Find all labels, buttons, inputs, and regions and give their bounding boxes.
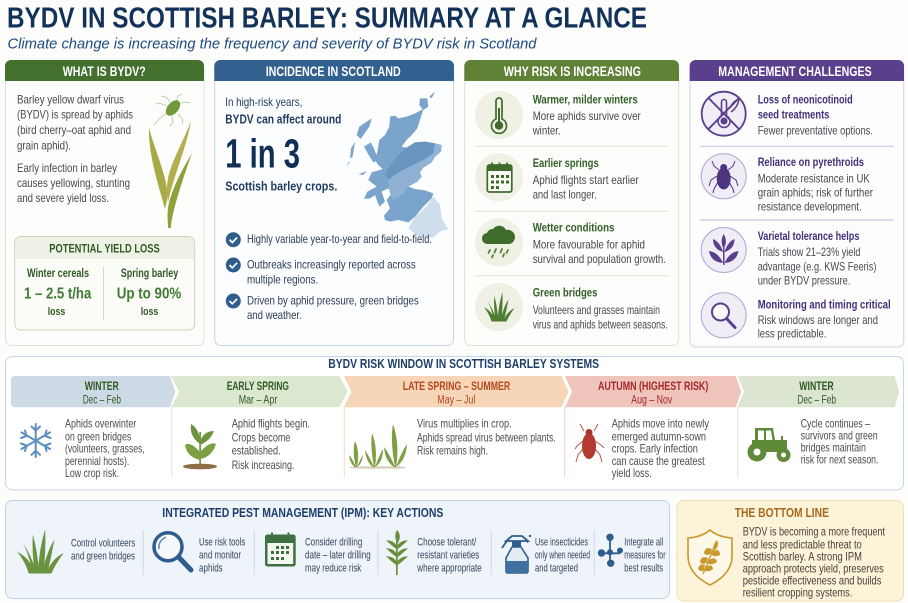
text: 1 in 3 statistic: BYDV can affect around	[225, 112, 341, 126]
icon: red aphid	[575, 424, 604, 462]
item: earlier springs: and last longer.	[533, 189, 597, 202]
text: bottom line summary: resilient cropping systems.	[743, 586, 852, 599]
action: targeted insecticides	[502, 535, 590, 575]
heading: the bottom line: THE BOTTOM LINE	[735, 505, 829, 520]
action: tolerant varieties: Choose tolerant/	[417, 536, 476, 548]
subtitle: Climate change is increasing the frequency and severity of BYDV risk in Scotland	[8, 36, 537, 52]
stat: spring barley: Spring barley	[121, 268, 179, 280]
panel: what is BYDV	[5, 60, 204, 346]
action: tolerant varieties: resistant varieties	[417, 550, 480, 562]
item: warmer winters: Warmer, milder winters	[533, 92, 638, 106]
bullet: outbreaks	[226, 258, 416, 286]
panel header: what is BYDV: WHAT IS BYDV?	[63, 63, 146, 79]
item: wetter conditions: survival and population growth.	[533, 253, 666, 266]
item: loss of neonicotinoids: Loss of neonicotinoid	[758, 92, 853, 106]
stat: winter cereals: 1 – 2.5 t/ha	[24, 286, 91, 302]
panel header: incidence	[214, 60, 454, 81]
action: integrate all measures: Integrate all	[624, 536, 663, 548]
heading: risk window: BYDV RISK WINDOW IN SCOTTISH BARLEY SYSTEMS	[328, 357, 599, 371]
item: monitoring and timing	[701, 293, 891, 341]
bullet: drivers: and weather.	[247, 309, 302, 322]
icon: seedling	[183, 424, 217, 469]
stage: autumn highest risk: Aug – Nov	[631, 394, 672, 406]
item: reliance on pyrethroids	[701, 154, 873, 214]
bullet: outbreaks: multiple regions.	[247, 273, 318, 286]
item: earlier springs: Earlier springs	[533, 156, 599, 170]
stat: spring barley: Up to 90%	[117, 286, 181, 302]
stage: autumn highest risk: crops. Early infection	[612, 443, 698, 456]
item: varietal tolerance: Trials show 21–23% yield	[758, 246, 860, 259]
bullet: variable: Highly variable year-to-year and field-to-field.	[247, 233, 432, 246]
stage: winter again: WINTER	[799, 381, 834, 393]
item: wetter conditions: More favourable for aphid	[533, 238, 645, 251]
stage: winter	[11, 376, 175, 480]
text: bottom line summary: Scottish barley. A strong IPM	[743, 550, 862, 563]
action: risk tools	[154, 533, 246, 575]
bullet: drivers: Driven by aphid pressure, green bridges	[247, 294, 419, 307]
stage: winter: Dec – Feb	[83, 394, 121, 406]
item: earlier springs	[475, 153, 639, 202]
action: drilling date: Consider drilling	[305, 536, 362, 548]
stage: winter: WINTER	[85, 381, 119, 393]
text: BYDV description: (bird cherry–oat aphid and	[17, 124, 131, 137]
panel: incidence in Scotland	[214, 60, 454, 346]
icon: aphid	[154, 94, 190, 126]
item: green bridges	[475, 283, 668, 331]
action: drilling date	[265, 532, 371, 575]
stage: early spring: EARLY SPRING	[227, 381, 289, 393]
stage: winter again	[738, 376, 899, 467]
stage: winter: Low crop risk.	[65, 467, 119, 480]
text: 1 in 3 statistic	[225, 95, 341, 194]
stage: autumn highest risk	[565, 376, 741, 480]
text: BYDV description: grain aphid).	[17, 140, 71, 152]
text: BYDV description: (BYDV) is spread by aphids	[17, 109, 133, 122]
panel: integrated pest management	[6, 500, 670, 598]
stage: autumn highest risk: Aphids move into newly	[612, 418, 709, 431]
item: reliance on pyrethroids: Reliance on pyrethroids	[758, 155, 864, 169]
stage: late spring to summer: Risk remains high.	[417, 445, 488, 458]
stage: winter again: survivors and green	[801, 429, 878, 442]
stage: early spring: Risk increasing.	[232, 459, 294, 472]
stage: winter: (volunteers, grasses,	[65, 443, 145, 456]
text: 1 in 3 statistic: In high-risk years,	[225, 95, 302, 109]
text: bottom line summary	[743, 526, 886, 599]
stage: early spring: established.	[232, 445, 281, 458]
item: monitoring and timing: Risk windows are longer and	[758, 314, 878, 327]
text: bottom line summary: and less predictable threat to	[743, 538, 862, 551]
bullet: variable	[226, 232, 432, 247]
stage: late spring to summer: Aphids spread virus between plants.	[417, 432, 556, 445]
action: tolerant varieties	[386, 530, 482, 575]
action: integrate all measures	[598, 534, 666, 575]
stage: winter again: risk for next season.	[801, 454, 878, 467]
stage: autumn highest risk: emerged autumn-sown	[612, 430, 706, 443]
item: varietal tolerance: under BYDV pressure.	[758, 274, 850, 287]
stage: autumn highest risk: can cause the greatest	[612, 455, 705, 468]
stage: autumn highest risk: yield loss.	[612, 467, 652, 480]
item: loss of neonicotinoids: seed treatments	[758, 107, 830, 121]
item: monitoring and timing: less predictable.	[758, 328, 826, 341]
item: green bridges: virus and aphids between seasons.	[533, 318, 668, 331]
item: varietal tolerance: advantage (e.g. KWS Feeris)	[758, 260, 877, 273]
text: BYDV description: and severe yield loss.	[17, 192, 109, 205]
item: varietal tolerance: Varietal tolerance helps	[758, 229, 860, 243]
item: wetter conditions: Wetter conditions	[533, 220, 615, 234]
item: green bridges: Volunteers and grasses maintain	[533, 304, 660, 317]
stage: early spring: Mar – Apr	[239, 394, 277, 406]
stat: winter cereals: loss	[48, 306, 65, 318]
heading: IPM key actions: INTEGRATED PEST MANAGEMENT (IPM): KEY ACTIONS	[162, 505, 444, 520]
action: integrate all measures: measures for	[624, 550, 666, 562]
action: targeted insecticides: Use insecticides	[535, 536, 588, 548]
item: reliance on pyrethroids: Moderate resistance in UK	[758, 172, 870, 185]
title: BYDV IN SCOTTISH BARLEY: SUMMARY AT A GLANCE	[7, 2, 647, 34]
panel: potential yield loss	[15, 236, 195, 330]
stat: spring barley: loss	[141, 306, 158, 318]
item: loss of neonicotinoids	[702, 92, 873, 137]
panel header: incidence: INCIDENCE IN SCOTLAND	[266, 63, 401, 79]
text: BYDV description: causes yellowing, stunting	[17, 177, 130, 190]
action: targeted insecticides: and targeted	[535, 563, 578, 575]
action: risk tools: and monitor	[199, 550, 241, 562]
stage: winter again: Dec – Feb	[797, 394, 836, 406]
bullet: outbreaks: Outbreaks increasingly reported across	[247, 258, 416, 271]
action: control volunteers	[17, 529, 136, 574]
icon: tractor	[748, 428, 790, 462]
action: control volunteers: and green bridges	[71, 551, 135, 563]
action: control volunteers: Control volunteers	[71, 537, 136, 549]
panel header: management	[690, 60, 904, 81]
item: green bridges: Green bridges	[533, 285, 598, 299]
action: drilling date: may reduce risk	[305, 563, 362, 575]
item: warmer winters: More aphids survive over	[533, 110, 641, 123]
stage: early spring: Aphid flights begin.	[232, 418, 310, 431]
stage: winter: Aphids overwinter	[65, 418, 136, 431]
bullet: drivers	[226, 294, 419, 322]
item: reliance on pyrethroids: grain aphids; risk of further	[758, 187, 873, 200]
map of Scotland	[347, 92, 448, 238]
stage: winter again: bridges maintain	[801, 441, 866, 454]
stage: winter again: Cycle continues –	[801, 417, 870, 430]
item: reliance on pyrethroids: resistance development.	[758, 201, 862, 214]
stage: winter: perennial hosts).	[65, 455, 129, 468]
text: BYDV description	[17, 94, 133, 205]
item: wetter conditions	[475, 218, 666, 266]
stage: late spring to summer: LATE SPRING – SUMMER	[403, 381, 511, 393]
stat: winter cereals: Winter cereals	[27, 268, 89, 280]
text: BYDV description: Early infection in barley	[17, 162, 117, 175]
icon: shield with wheat	[688, 530, 732, 585]
item: earlier springs: Aphid flights start earlier	[533, 174, 639, 187]
item: loss of neonicotinoids: Fewer preventative options.	[758, 124, 873, 137]
panel header: why risk	[464, 60, 679, 81]
stage: early spring: Crops become	[232, 432, 290, 445]
panel: management challenges	[690, 60, 904, 347]
stage: early spring	[171, 376, 348, 472]
panel header: why risk: WHY RISK IS INCREASING	[504, 63, 641, 79]
item: warmer winters	[475, 91, 641, 139]
stage: late spring to summer: Virus multiplies in crop.	[417, 418, 512, 431]
icon: three growing plants	[349, 424, 407, 469]
panel: why risk is increasing	[464, 60, 679, 346]
stage: autumn highest risk: AUTUMN (HIGHEST RISK)	[598, 381, 708, 393]
icon: yellowing barley plant	[149, 121, 192, 228]
stage: winter: on green bridges	[65, 430, 131, 443]
action: risk tools: aphids	[199, 563, 223, 575]
action: drilling date: date – later drilling	[305, 550, 371, 562]
action: targeted insecticides: only when needed	[535, 550, 590, 562]
text: 1 in 3 statistic: 1 in 3	[225, 130, 300, 176]
action: integrate all measures: best results	[624, 563, 663, 575]
text: BYDV description: Barley yellow dwarf virus	[17, 94, 124, 106]
stat: winter cereals	[24, 268, 91, 318]
stage: late spring to summer: May – Jul	[437, 394, 475, 406]
text: 1 in 3 statistic: Scottish barley crops.	[225, 179, 337, 194]
panel: the bottom line	[677, 500, 904, 601]
item: varietal tolerance	[701, 228, 877, 287]
panel header: what is BYDV	[5, 60, 204, 81]
action: risk tools: Use risk tools	[199, 536, 246, 548]
panel: risk window timeline	[6, 356, 904, 490]
action: tolerant varieties: where appropriate	[417, 563, 482, 575]
icon: snowflake	[21, 424, 50, 457]
item: warmer winters: winter.	[532, 124, 561, 137]
stage: late spring to summer	[344, 376, 569, 469]
stat: spring barley	[117, 268, 181, 318]
heading: potential yield loss: POTENTIAL YIELD LOSS	[49, 242, 160, 256]
